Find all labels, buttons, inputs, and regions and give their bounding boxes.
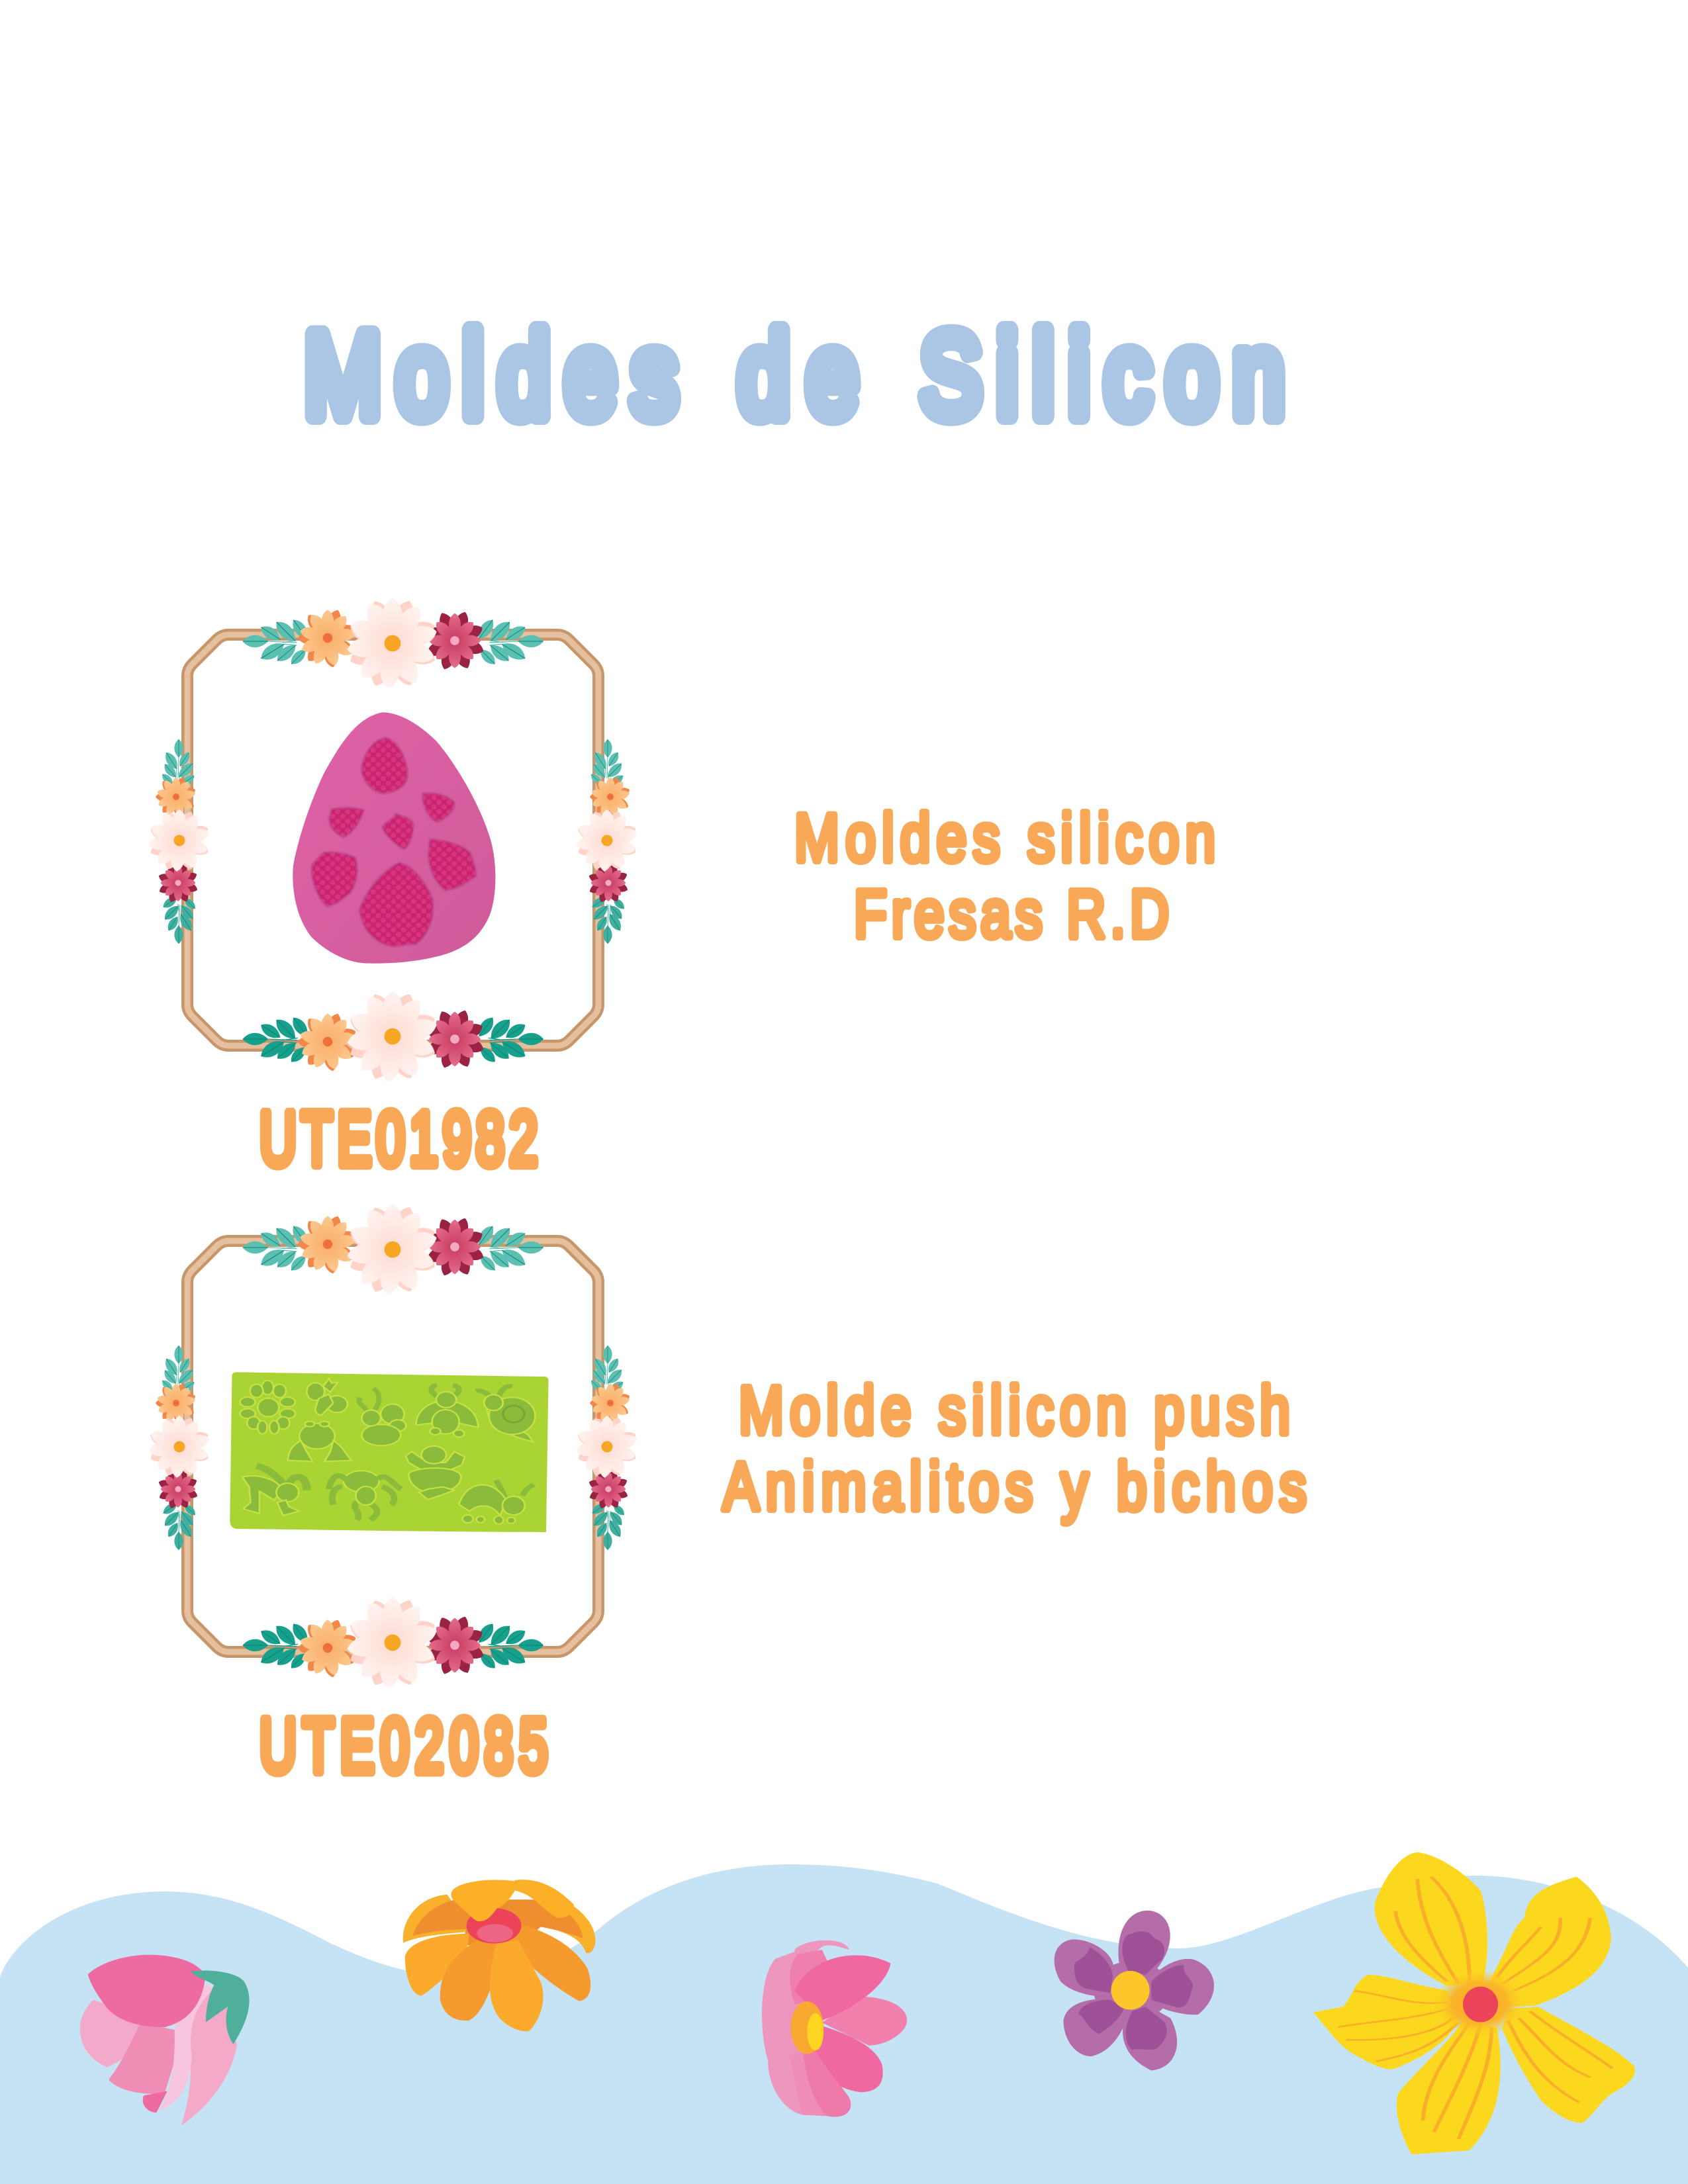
title: Silicon (920, 309, 1284, 441)
sub: bee cavity (306, 1379, 348, 1415)
product 2 description (723, 1372, 1307, 1524)
title (305, 309, 1284, 441)
product code 1: UTE01982 (259, 1097, 538, 1181)
panel: product 2 floral frame (148, 1203, 639, 1689)
sub: flower cavity (240, 1381, 295, 1434)
sub: snail cavity (478, 1387, 535, 1441)
icon: orange flower (403, 1880, 595, 2031)
sub: grasshopper cavity (242, 1466, 306, 1516)
sub: caterpillar bee cavity (359, 1388, 406, 1445)
panel: product 1 floral frame (148, 597, 639, 1083)
product 1 description: Fresas R.D (854, 876, 1169, 952)
icon: yellow flower (1313, 1852, 1635, 2154)
sub: ladybug cavity (416, 1385, 478, 1437)
title: de (738, 309, 858, 441)
product code 2: UTE02085 (259, 1704, 547, 1788)
product 2 description: Animalitos y bichos (723, 1448, 1307, 1524)
icon: pink bud flower (80, 1955, 250, 2126)
product 1 description (794, 799, 1215, 952)
sub: frog cavity (287, 1422, 352, 1461)
background wave (0, 1864, 1688, 2184)
icon: purple flower (1055, 1911, 1214, 2071)
icon: pink flower (762, 1940, 907, 2117)
sub: caterpillar cavity (459, 1480, 534, 1524)
sub: spider cavity (329, 1471, 401, 1520)
product 2 description: Molde silicon push (739, 1372, 1290, 1448)
title: Moldes (305, 309, 677, 441)
sub: second frog cavity (406, 1446, 465, 1500)
product image: pink strawberry silicone mold (293, 712, 495, 964)
product 1 description: Moldes silicon (794, 799, 1215, 876)
product image: green insects silicone mold (230, 1372, 549, 1532)
